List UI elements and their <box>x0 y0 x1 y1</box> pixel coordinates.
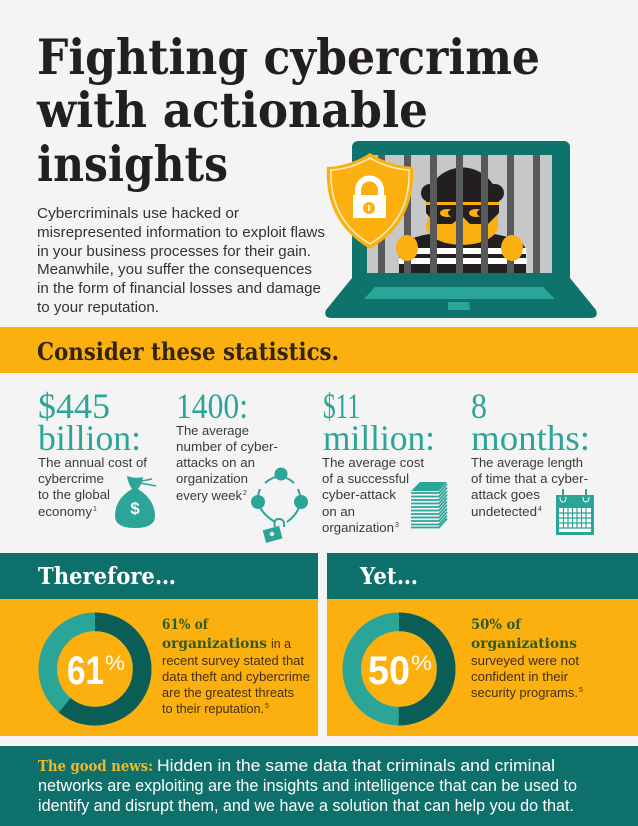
icon: money bag: $ <box>130 499 140 518</box>
stat: 8 months: undetected <box>471 504 537 519</box>
stat: $445 billion: to the global <box>38 487 110 502</box>
stat: $11 million: cyber-attack <box>322 487 397 502</box>
heading: yet: Yet… <box>359 563 418 590</box>
stat: $445 billion: billion: <box>38 418 141 458</box>
stat: $11 million: of a successful <box>322 471 409 486</box>
stat: 1400 <box>176 386 308 543</box>
text: 61% of organizations: in a <box>271 636 292 651</box>
jail bars <box>378 155 540 273</box>
text: 50% of organizations: 50% of <box>471 617 522 633</box>
stat: 1400: attacks on an <box>176 455 255 470</box>
donut: 61%: 61 <box>67 649 104 693</box>
panel: the good news: Hidden in the same data that criminals and criminal <box>157 757 555 775</box>
stat: 1400: number of cyber- <box>176 439 278 454</box>
text: 61% of organizations: organizations <box>162 636 267 652</box>
title: insights <box>37 135 228 193</box>
heading: therefore: Therefore… <box>38 563 176 590</box>
text: 61% of organizations: 61% of <box>162 617 209 633</box>
text: 61% of organizations: are the greatest threats <box>162 685 294 700</box>
donut: 50%: % <box>411 652 432 675</box>
icon: money bag <box>115 476 156 528</box>
text: 50% of organizations: confident in their <box>471 669 569 684</box>
stat: 8 months: months: <box>471 418 590 458</box>
text: 50% of organizations: organizations <box>471 636 577 652</box>
illustration: laptop with jailed thief and shield <box>325 141 597 318</box>
stat: 8 months <box>471 386 594 535</box>
stat: 8 months: attack goes <box>471 487 541 502</box>
stat: $11 million: million: <box>323 418 435 458</box>
icon: stack of bills <box>411 482 447 528</box>
stat: $11 million: 3 <box>395 522 399 529</box>
stat: 1400: every week <box>176 488 243 503</box>
donut: 61% <box>48 622 142 716</box>
icon: broken chain network with lock <box>251 468 308 543</box>
stat: $445 billion: 1 <box>93 506 97 513</box>
text: 61% of organizations: to their reputation. <box>162 701 264 716</box>
text: 61% of organizations <box>162 617 310 716</box>
panel: the good news: The good news: <box>38 757 153 775</box>
icon: calendar <box>556 489 594 535</box>
text: 50% of organizations <box>471 617 583 700</box>
stat: 8 months: The average length <box>471 455 583 470</box>
intro text: Cybercriminals use hacked or <box>37 205 239 222</box>
stat: $445 billion: The annual cost of <box>38 455 147 470</box>
panel: therefore <box>0 553 318 736</box>
stat: $11 million: on an <box>322 504 355 519</box>
stat: $11 million: $11 <box>323 386 360 426</box>
stat: $445 billion: economy <box>38 504 93 519</box>
stat: 1400: 2 <box>243 490 247 497</box>
title: with actionable <box>36 81 428 139</box>
text: 50% of organizations: 5 <box>579 687 583 694</box>
stat: $445 billion <box>38 386 156 528</box>
panel: the good news: identify and disrupt them, and we have a solution that can help you do that. <box>38 797 574 815</box>
title <box>36 28 540 193</box>
shield with padlock <box>327 153 413 249</box>
stat: 8 months: of time that a cyber- <box>471 471 588 486</box>
stat: 1400: organization <box>176 471 248 486</box>
thief <box>399 167 527 273</box>
stat: $11 million: organization <box>322 520 394 535</box>
donut: 50% <box>352 622 446 716</box>
laptop <box>325 141 597 318</box>
intro text: to your reputation. <box>37 299 159 316</box>
stat: 8 months: 4 <box>538 506 542 513</box>
stat: 1400: 1400: <box>176 386 248 426</box>
intro text <box>37 205 325 316</box>
panel: the good news: networks are exploiting are the insights and intelligence that can be used to <box>38 777 577 795</box>
intro text: in the form of financial losses and damage <box>37 280 321 297</box>
panel: the good news <box>0 746 638 826</box>
donut: 50%: 50 <box>368 649 410 693</box>
text: 50% of organizations: security programs. <box>471 685 578 700</box>
stat: $11 million <box>322 386 447 535</box>
text: 61% of organizations: recent survey stated that <box>162 653 304 668</box>
intro text: in your business processes for their gain. <box>37 243 311 260</box>
text: 50% of organizations: surveyed were not <box>471 653 579 668</box>
stat: $445 billion: cybercrime <box>38 471 104 486</box>
stat: 8 months: 8 <box>471 386 487 426</box>
stat: $11 million: The average cost <box>322 455 424 470</box>
text: 61% of organizations: 5 <box>265 703 269 710</box>
hands <box>396 235 523 261</box>
stat: 1400: The average <box>176 423 249 438</box>
title: Fighting cybercrime <box>37 28 540 86</box>
band: consider these statistics <box>0 327 638 373</box>
intro text: Meanwhile, you suffer the consequences <box>37 261 312 278</box>
band: consider these statistics: Consider these statistics. <box>37 337 339 366</box>
intro text: misrepresented information to exploit flaws <box>37 224 325 241</box>
panel: yet <box>327 553 638 736</box>
text: 61% of organizations: data theft and cybercrime <box>162 669 310 684</box>
stat: $445 billion: $445 <box>38 386 110 426</box>
donut: 61%: % <box>105 652 125 675</box>
